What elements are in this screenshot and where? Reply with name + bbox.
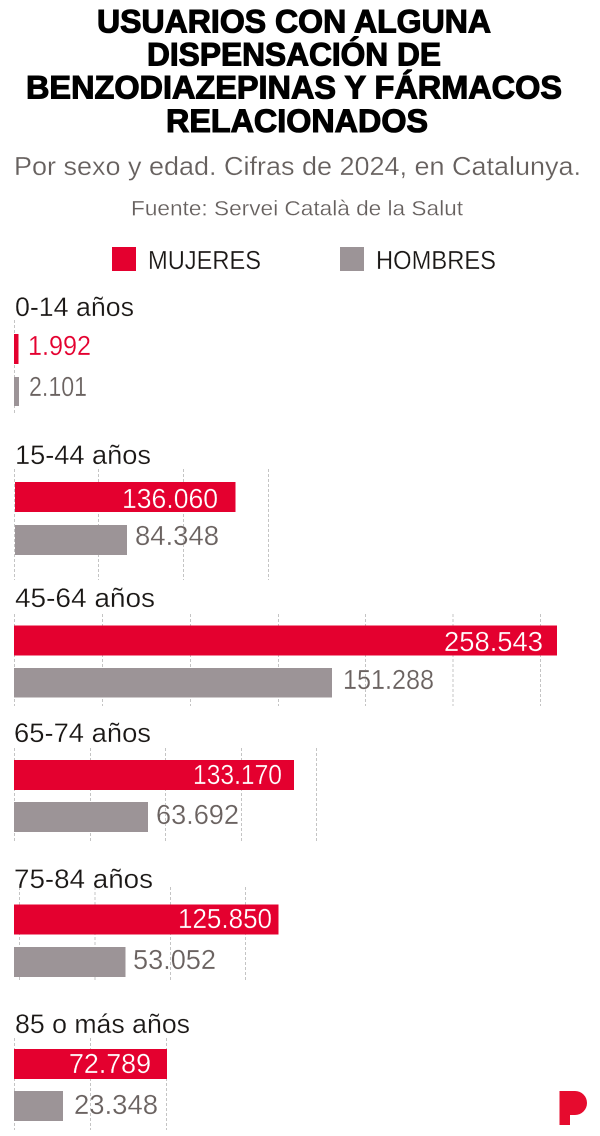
chart group: 75-84 años <box>14 864 278 980</box>
title <box>26 4 562 139</box>
chart group: 65-74 años <box>14 718 316 841</box>
chart group: 65-74 años: 65-74 años <box>14 718 151 748</box>
chart group: 75-84 años: 125.850 <box>178 903 272 934</box>
chart group: 85 o más años: 23.348 <box>74 1089 158 1120</box>
chart group: 0-14 años <box>14 292 134 414</box>
chart group: 45-64 años: 151.288 <box>343 664 434 695</box>
chart group: 45-64 años: 45-64 años <box>15 583 155 613</box>
chart group: 0-14 años: 2.101 <box>29 371 87 402</box>
subtitle: Por sexo y edad. Cifras de 2024, en Catalunya. <box>14 151 581 181</box>
source: Fuente: Servei Català de la Salut <box>131 196 463 220</box>
title: DISPENSACIÓN DE <box>147 36 441 72</box>
chart group: 65-74 años: 133.170 <box>193 759 282 790</box>
chart group: 45-64 años <box>14 583 557 706</box>
chart group: 15-44 años <box>14 440 268 580</box>
legend <box>112 245 496 275</box>
icon: publisher logo P <box>560 1091 587 1125</box>
chart group: 75-84 años: 53.052 <box>133 944 216 975</box>
chart group: 85 o más años <box>14 1009 190 1130</box>
chart group: 75-84 años: 75-84 años <box>14 864 153 894</box>
title: USUARIOS CON ALGUNA <box>97 4 491 40</box>
chart group: 15-44 años: 136.060 <box>122 483 218 514</box>
legend: hombres: HOMBRES <box>376 245 496 275</box>
legend: mujeres: MUJERES <box>148 245 261 275</box>
title: RELACIONADOS <box>166 103 428 139</box>
chart group: 0-14 años: 0-14 años <box>15 292 134 322</box>
chart group: 0-14 años: 1.992 <box>28 330 91 361</box>
chart group: 85 o más años: 85 o más años <box>15 1009 190 1039</box>
chart group: 15-44 años: 84.348 <box>135 520 219 551</box>
chart group: 65-74 años: 63.692 <box>156 799 239 830</box>
chart group: 15-44 años: 15-44 años <box>15 440 151 470</box>
chart group: 45-64 años: 258.543 <box>444 626 543 657</box>
title: BENZODIAZEPINAS Y FÁRMACOS <box>26 68 562 106</box>
chart group: 85 o más años: 72.789 <box>69 1048 151 1079</box>
